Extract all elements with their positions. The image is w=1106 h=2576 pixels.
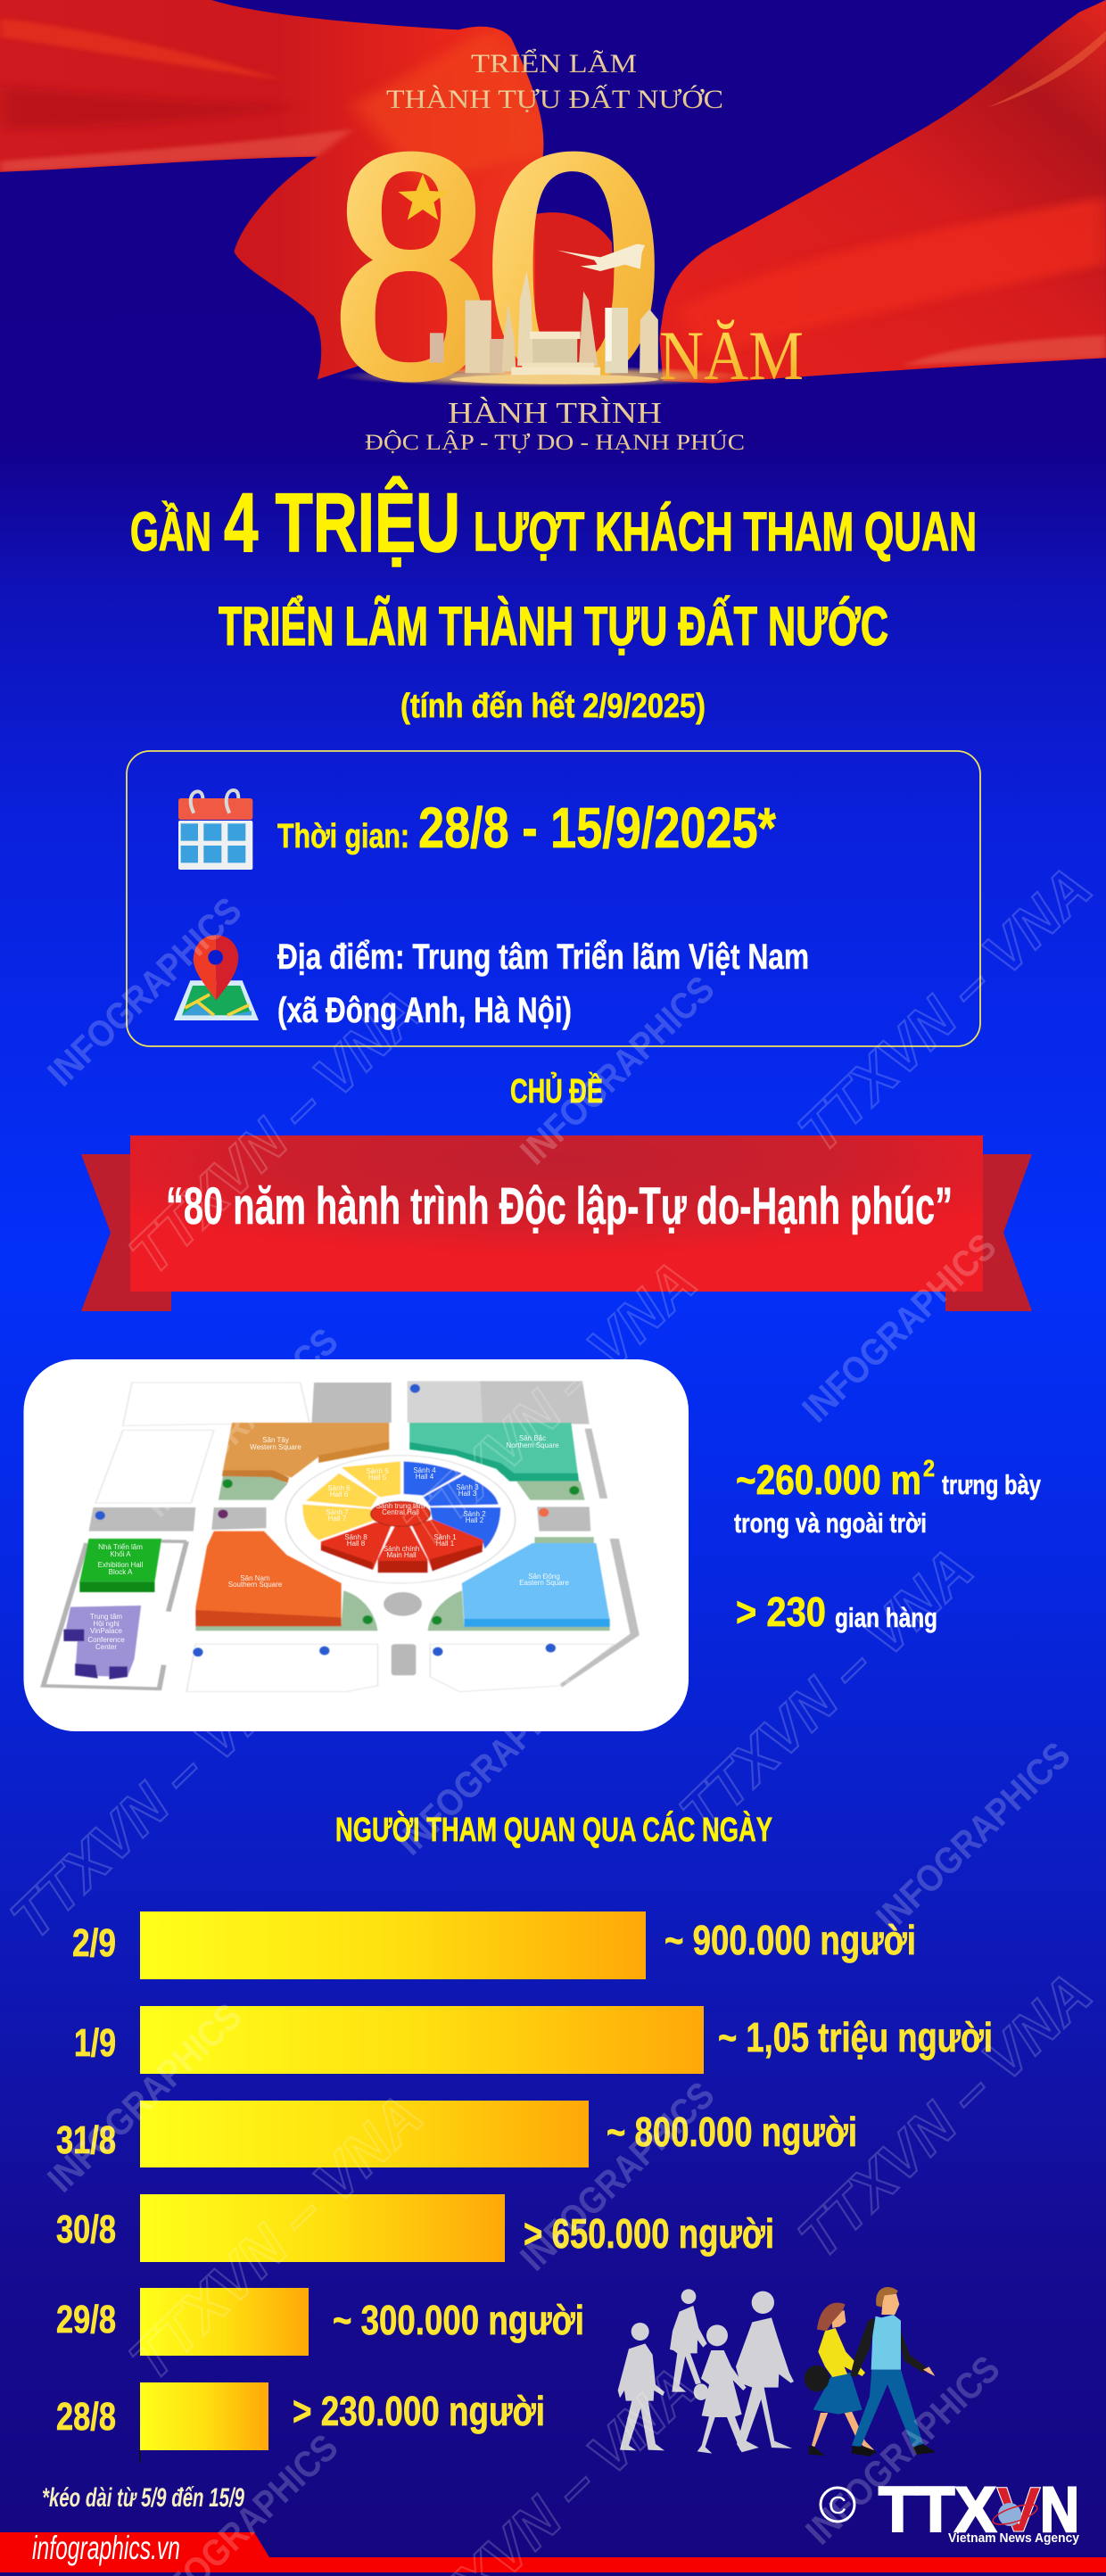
exhibition name: TRIỂN LÃM	[471, 49, 637, 78]
map labels: Sảnh 1	[433, 1533, 457, 1541]
stat: display area: 2	[923, 1455, 935, 1482]
infographic page: INFOGRAPHICS	[797, 2348, 1008, 2552]
site address: infographics.vn	[32, 2530, 180, 2566]
red silk ribbon	[0, 0, 1106, 387]
bar 1/9	[74, 2006, 993, 2074]
icon: star	[398, 174, 448, 220]
map labels: Western Square	[250, 1443, 301, 1451]
grey walkers	[618, 2289, 794, 2454]
woman walker	[805, 2303, 874, 2456]
panel: venue map	[23, 1359, 689, 1731]
map labels: Hall 2	[466, 1516, 484, 1524]
main title: GẦN	[130, 501, 211, 562]
bar 1/9: 1/9	[74, 2021, 116, 2065]
infographic page: INFOGRAPHICS	[512, 968, 722, 1172]
map labels: Eastern Square	[519, 1579, 569, 1587]
logo: TTXVN: N	[1040, 2475, 1079, 2546]
logo: TTXVN: V	[996, 2475, 1041, 2546]
logo: TTXVN: TTX	[879, 2475, 996, 2546]
map labels: Center	[95, 1643, 117, 1651]
map labels: Nhà Triển lãm	[98, 1543, 143, 1551]
map labels: Hall 5	[368, 1474, 387, 1482]
infographic page: TTXVN – VNA	[390, 1248, 709, 1559]
bar 29/8	[56, 2288, 584, 2356]
time text: 28/8 - 15/9/2025*	[418, 796, 776, 860]
stat: booths: > 230	[736, 1589, 826, 1635]
map labels: Sảnh chính	[384, 1545, 419, 1553]
bar 29/8: 29/8	[56, 2298, 116, 2341]
time text	[277, 796, 776, 860]
map labels: Khối A	[110, 1550, 131, 1558]
map labels: Southern Square	[228, 1581, 283, 1589]
map labels: Sảnh 2	[463, 1510, 486, 1518]
man walker	[850, 2287, 936, 2456]
ground glow	[339, 366, 749, 387]
journey slogan	[365, 397, 745, 455]
map labels: Sân Bắc	[519, 1434, 546, 1442]
bar 28/8: 28/8	[56, 2395, 116, 2439]
bar 30/8: > 650.000 người	[524, 2210, 774, 2257]
map labels: Hội nghị	[93, 1620, 120, 1628]
map labels: Hall 7	[328, 1515, 347, 1523]
exhibition hall block A	[79, 1539, 161, 1592]
subtitle date: (tính đến hết 2/9/2025)	[400, 688, 706, 725]
icon: map pin	[174, 935, 259, 1020]
logo: TTXVN: Vietnam News Agency	[948, 2531, 1080, 2546]
infographic page: INFOGRAPHICS	[388, 1658, 598, 1862]
map labels	[87, 1434, 569, 1651]
central hall sectors	[302, 1461, 500, 1573]
theme banner	[81, 1135, 1032, 1311]
infographic page: INFOGRAPHICS	[39, 1995, 250, 2200]
panel: time and place	[127, 751, 980, 1046]
infographic page: TTXVN – VNA	[0, 1640, 317, 1952]
time text: Thời gian:	[277, 818, 409, 855]
bar chart: visitors per day	[56, 1911, 993, 2463]
infographic page: INFOGRAPHICS	[868, 1734, 1078, 1938]
eastern square	[428, 1537, 610, 1631]
year label: NĂM	[659, 317, 804, 394]
map markers	[95, 1384, 579, 1656]
infographic page: INFOGRAPHICS	[39, 889, 250, 1094]
map labels: Sảnh 7	[326, 1508, 349, 1516]
infographic page: INFOGRAPHICS	[512, 2074, 722, 2278]
stat: display area: trưng bày	[942, 1469, 1042, 1500]
map labels: Sảnh 6	[327, 1484, 351, 1492]
bar 31/8: 31/8	[56, 2118, 116, 2162]
map labels: Trung tâm	[90, 1613, 122, 1621]
conference centre	[63, 1606, 141, 1680]
venue text: Địa điểm: Trung tâm Triển lãm Việt Nam	[277, 937, 809, 977]
map labels: Sân Tây	[262, 1436, 289, 1444]
stat: display area: trong và ngoài trời	[734, 1507, 927, 1539]
map labels: Sảnh trung tâm	[376, 1502, 425, 1510]
bar 28/8: > 230.000 người	[293, 2388, 545, 2434]
map labels: Hall 1	[436, 1540, 455, 1548]
main title: 4 TRIỆU	[224, 475, 460, 569]
number 80: 0	[483, 81, 664, 448]
bar 31/8: ~ 800.000 người	[607, 2109, 857, 2155]
skyline	[430, 270, 659, 384]
icon: calendar	[178, 790, 252, 870]
map labels: Block A	[109, 1568, 133, 1576]
map labels: Northern Square	[506, 1441, 559, 1449]
bar 31/8	[56, 2101, 857, 2167]
northern square	[409, 1423, 585, 1500]
logo: TTXVN	[879, 2475, 1080, 2546]
infographic page: INFOGRAPHICS	[136, 1320, 346, 1524]
map labels: Sân Đông	[528, 1573, 560, 1581]
map labels: Hall 6	[330, 1490, 349, 1499]
bar 2/9: 2/9	[72, 1921, 116, 1965]
plaza ring	[285, 1456, 516, 1583]
map labels: Sảnh 4	[413, 1466, 436, 1474]
number 80	[332, 81, 664, 448]
80 years emblem	[332, 81, 804, 448]
map labels: Sảnh 8	[344, 1533, 367, 1541]
footnote: *kéo dài từ 5/9 đến 15/9	[42, 2483, 244, 2513]
bar 2/9: ~ 900.000 người	[664, 1917, 916, 1963]
exhibition name	[386, 49, 723, 114]
main title	[130, 475, 977, 656]
infographic page: INFOGRAPHICS	[794, 1226, 1004, 1430]
bar 30/8	[56, 2194, 774, 2262]
copyright mark	[821, 2488, 854, 2522]
bar 30/8: 30/8	[56, 2208, 116, 2251]
map labels: Exhibition Hall	[98, 1561, 144, 1569]
stat: display area	[734, 1455, 1042, 1539]
western square	[219, 1423, 389, 1500]
stat: booths	[736, 1589, 937, 1635]
bar 28/8	[56, 2382, 545, 2463]
map labels: Conference	[87, 1636, 125, 1644]
infographic page: TTXVN – VNA	[116, 2082, 435, 2393]
map labels: Hall 4	[416, 1473, 434, 1481]
bar 1/9: ~ 1,05 triệu người	[718, 2014, 993, 2060]
map labels: Sảnh 5	[366, 1467, 389, 1475]
icon: airplane	[557, 244, 645, 271]
infographic page: TTXVN – VNA	[785, 854, 1104, 1165]
map labels: Central Hall	[382, 1508, 419, 1516]
theme heading: CHỦ ĐỀ	[510, 1071, 603, 1110]
stat: booths: gian hàng	[835, 1602, 937, 1633]
map labels: Sân Nam	[240, 1574, 270, 1582]
map labels: VinPalace	[90, 1627, 122, 1635]
venue text	[277, 937, 809, 1030]
red fold behind zero	[535, 212, 621, 366]
number 80: 8	[332, 81, 491, 448]
bar 29/8: ~ 300.000 người	[333, 2297, 584, 2343]
map labels: Main Hall	[386, 1551, 417, 1559]
stat: display area: ~260.000 m	[736, 1457, 921, 1503]
southern square	[195, 1532, 377, 1631]
grey lots and outlines	[43, 1381, 640, 1692]
infographic page: TTXVN – VNA	[785, 1960, 1104, 2271]
venue text: (xã Đông Anh, Hà Nội)	[277, 991, 572, 1030]
infographic page: TTXVN – VNA	[116, 976, 435, 1287]
bar 2/9	[72, 1911, 916, 1979]
journey slogan: HÀNH TRÌNH	[448, 397, 662, 430]
map labels: Hall 3	[458, 1490, 477, 1498]
journey slogan: ĐỘC LẬP - TỰ DO - HẠNH PHÚC	[365, 430, 745, 455]
map labels: Sảnh 3	[456, 1483, 479, 1491]
chart heading: NGƯỜI THAM QUAN QUA CÁC NGÀY	[335, 1810, 772, 1849]
exhibition name: THÀNH TỰU ĐẤT NƯỚC	[386, 84, 723, 114]
map labels: Hall 8	[347, 1540, 366, 1548]
copyright mark: C	[829, 2491, 846, 2519]
footer red band	[0, 2532, 1106, 2572]
infographic page: TTXVN – VNA	[666, 1535, 986, 1846]
icon: walking visitors	[618, 2287, 936, 2456]
